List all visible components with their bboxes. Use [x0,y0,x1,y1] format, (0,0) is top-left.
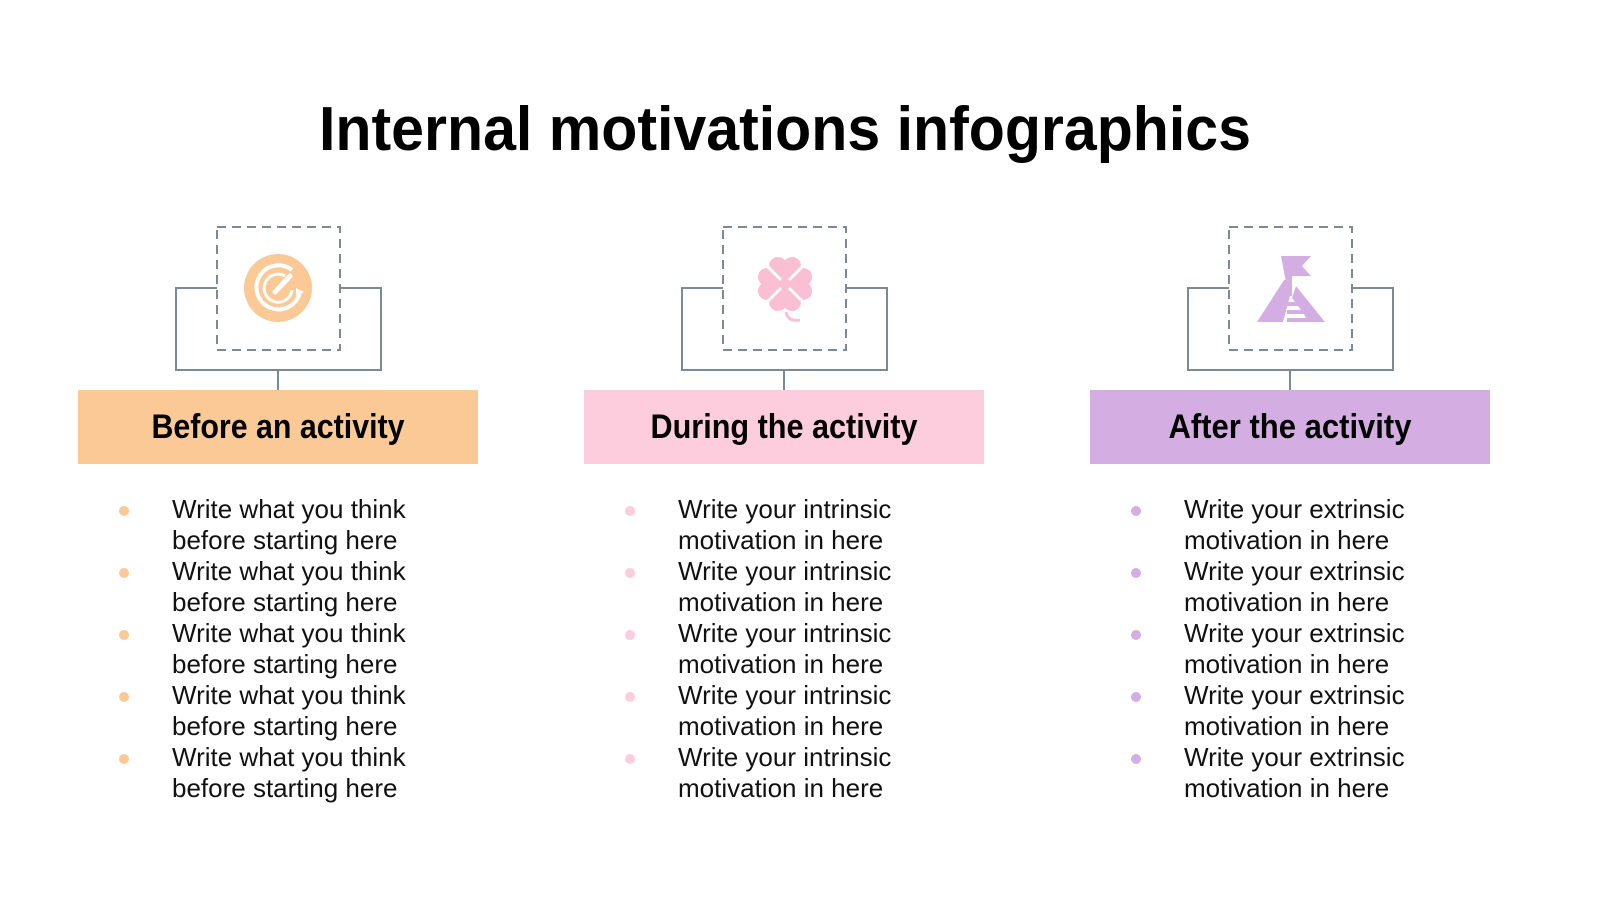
header: during: During the activity [650,408,918,446]
bullet list: during: Write your intrinsic [678,742,891,772]
icon: clover [758,257,812,320]
bullet list: before: Write what you think [172,494,407,524]
bullet list: before [119,494,407,803]
panel: during [584,227,984,803]
bullet list: before: before starting here [172,773,397,803]
bullet list: before: Write what you think [172,618,407,648]
bullet list: during: motivation in here [678,773,883,803]
icon: flag mountain [1257,256,1325,322]
header: before [78,390,478,464]
header: during [584,390,984,464]
bullet list: after: Write your extrinsic [1184,680,1405,710]
bullet list: before: Write what you think [172,742,407,772]
bullet list: after: Write your extrinsic [1184,494,1405,524]
bullet list: during [625,494,891,803]
bullet list: during: motivation in here [678,649,883,679]
bullet list: before: before starting here [172,587,397,617]
panel: after [1090,227,1490,803]
bullet list: after: motivation in here [1184,773,1389,803]
bullet list: before: Write what you think [172,680,407,710]
bullet list: before: before starting here [172,711,397,741]
bullet list: during: Write your intrinsic [678,494,891,524]
bullet list: after: motivation in here [1184,587,1389,617]
frame: before [176,227,381,390]
title: Internal motivations infographics [319,95,1251,164]
bullet list: during: motivation in here [678,587,883,617]
icon: gauge [244,254,312,322]
bullet list: after: motivation in here [1184,525,1389,555]
header: before: Before an activity [152,408,405,446]
bullet list: after: Write your extrinsic [1184,618,1405,648]
frame: during [682,227,887,390]
bullet list: before: before starting here [172,525,397,555]
panel: before [78,227,478,803]
frame: after [1188,227,1393,390]
bullet list: before: before starting here [172,649,397,679]
bullet list: after: motivation in here [1184,649,1389,679]
bullet list: after: Write your extrinsic [1184,742,1405,772]
bullet list: after: motivation in here [1184,711,1389,741]
bullet list: before: Write what you think [172,556,407,586]
bullet list: during: Write your intrinsic [678,556,891,586]
bullet list: during: motivation in here [678,711,883,741]
header: after [1090,390,1490,464]
bullet list: during: motivation in here [678,525,883,555]
bullet list: during: Write your intrinsic [678,618,891,648]
bullet list: during: Write your intrinsic [678,680,891,710]
bullet list: after: Write your extrinsic [1184,556,1405,586]
bullet list: after [1131,494,1405,803]
header: after: After the activity [1168,408,1412,446]
